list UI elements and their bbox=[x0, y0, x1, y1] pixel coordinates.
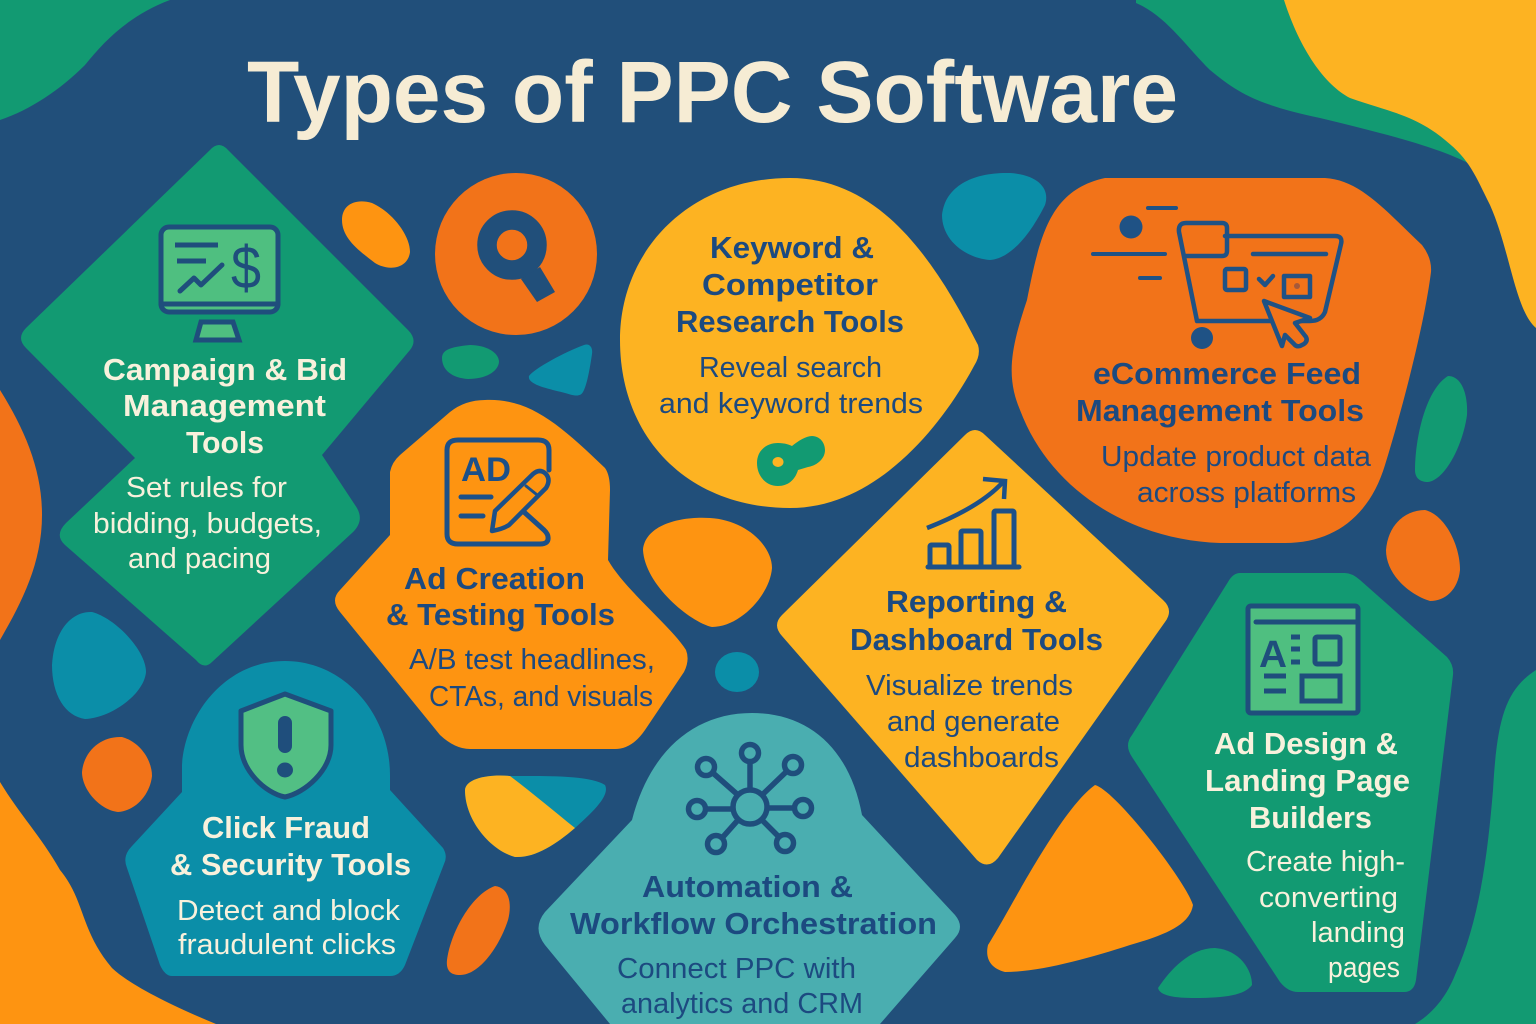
description: keyword: Reveal search bbox=[699, 352, 882, 384]
description: reporting: Visualize trends bbox=[866, 670, 1073, 702]
blob: orange bottom bbox=[447, 886, 510, 975]
heading: ecommerce: Management Tools bbox=[1076, 393, 1364, 428]
description: click fraud: Detect and block bbox=[177, 895, 401, 927]
icon: ad document with pencil bbox=[447, 440, 549, 544]
panel: keyword and competitor research bbox=[620, 178, 979, 508]
heading: ad design: Builders bbox=[1249, 800, 1372, 835]
icon: landing page layout bbox=[1248, 606, 1358, 713]
description: ad design: Create high- bbox=[1246, 846, 1405, 878]
blob: green bottom bbox=[1158, 948, 1252, 998]
icon: green key blob bbox=[757, 436, 825, 486]
blob: small teal bbox=[715, 652, 759, 692]
description: campaign and bid: bidding, budgets, bbox=[93, 508, 322, 540]
background corner: bottom left amber bbox=[0, 782, 216, 1024]
description: keyword: and keyword trends bbox=[659, 388, 923, 420]
heading: keyword: Research Tools bbox=[676, 304, 904, 339]
description: reporting: and generate bbox=[887, 706, 1060, 738]
heading: campaign and bid: Tools bbox=[186, 425, 264, 460]
panel: automation and workflow orchestration bbox=[538, 713, 960, 1024]
description: ecommerce: Update product data bbox=[1101, 441, 1372, 473]
heading: automation: Automation & bbox=[642, 869, 853, 904]
heading: campaign and bid: Campaign & Bid bbox=[103, 352, 347, 387]
description: reporting: dashboards bbox=[904, 742, 1059, 774]
heading: automation: Workflow Orchestration bbox=[570, 906, 937, 941]
heading: keyword: Keyword & bbox=[710, 230, 874, 265]
blob: teal top bbox=[942, 173, 1046, 260]
panel: ad creation and testing bbox=[335, 400, 688, 749]
icon: shopping cart with cursor bbox=[1093, 208, 1341, 349]
icon: magnifier in orange circle bbox=[435, 173, 597, 335]
icon: landing page layout: A bbox=[1259, 634, 1287, 676]
description: campaign and bid: and pacing bbox=[128, 543, 271, 575]
icon: bar chart with arrow bbox=[927, 479, 1019, 567]
blob: yellow and teal bbox=[465, 776, 606, 857]
panel: ad design and landing page builders bbox=[1128, 573, 1453, 992]
icon: shield with exclamation bbox=[241, 694, 331, 797]
blob: orange right bbox=[1386, 510, 1460, 601]
heading: campaign and bid: Management bbox=[123, 388, 326, 423]
heading: reporting: Dashboard Tools bbox=[850, 622, 1103, 657]
panel: campaign and bid management bbox=[21, 145, 414, 666]
description: ad design: landing bbox=[1311, 917, 1405, 949]
background corner: left orange bbox=[0, 390, 42, 640]
blob: left teal bbox=[52, 612, 146, 719]
blob: green right bbox=[1415, 376, 1467, 482]
panel: reporting and dashboard bbox=[777, 430, 1169, 865]
background corner: top right green bbox=[1136, 0, 1480, 170]
background corner: bottom right green bbox=[1415, 670, 1536, 1024]
heading: ad design: Ad Design & bbox=[1214, 726, 1398, 761]
title: Types of PPC Software bbox=[247, 44, 1178, 141]
heading: ecommerce: eCommerce Feed bbox=[1093, 356, 1361, 391]
icon: ad document with pencil: AD bbox=[461, 451, 511, 489]
blob: teal triangle bbox=[529, 345, 592, 396]
description: automation: Connect PPC with bbox=[617, 953, 856, 985]
description: ad creation: A/B test headlines, bbox=[409, 644, 655, 676]
icon: monitor with dollar bbox=[161, 227, 278, 340]
blob: amber triangle bbox=[987, 785, 1193, 972]
icon: network hub bbox=[688, 744, 812, 852]
description: click fraud: fraudulent clicks bbox=[178, 929, 396, 961]
description: automation: analytics and CRM bbox=[621, 988, 863, 1020]
panel: ecommerce feed management bbox=[1012, 178, 1431, 543]
blob: amber middle bbox=[643, 518, 772, 627]
blob: left orange bbox=[82, 737, 152, 812]
background corner: top left green bbox=[0, 0, 170, 120]
heading: ad creation: & Testing Tools bbox=[386, 597, 615, 632]
description: ecommerce: across platforms bbox=[1137, 477, 1356, 509]
heading: ad creation: Ad Creation bbox=[404, 561, 585, 596]
heading: reporting: Reporting & bbox=[886, 584, 1067, 619]
blob: small green bbox=[442, 345, 499, 379]
description: ad design: pages bbox=[1328, 952, 1400, 984]
icon: monitor with dollar: $ bbox=[231, 234, 261, 301]
background corner: top right yellow bbox=[1284, 0, 1536, 328]
heading: keyword: Competitor bbox=[702, 267, 878, 302]
blob: amber top bbox=[342, 201, 410, 268]
panel: click fraud and security bbox=[125, 661, 446, 976]
description: ad design: converting bbox=[1259, 882, 1398, 914]
description: campaign and bid: Set rules for bbox=[126, 472, 287, 504]
description: ad creation: CTAs, and visuals bbox=[429, 681, 653, 713]
heading: ad design: Landing Page bbox=[1205, 763, 1410, 798]
heading: click fraud: & Security Tools bbox=[170, 847, 411, 882]
heading: click fraud: Click Fraud bbox=[202, 810, 370, 845]
